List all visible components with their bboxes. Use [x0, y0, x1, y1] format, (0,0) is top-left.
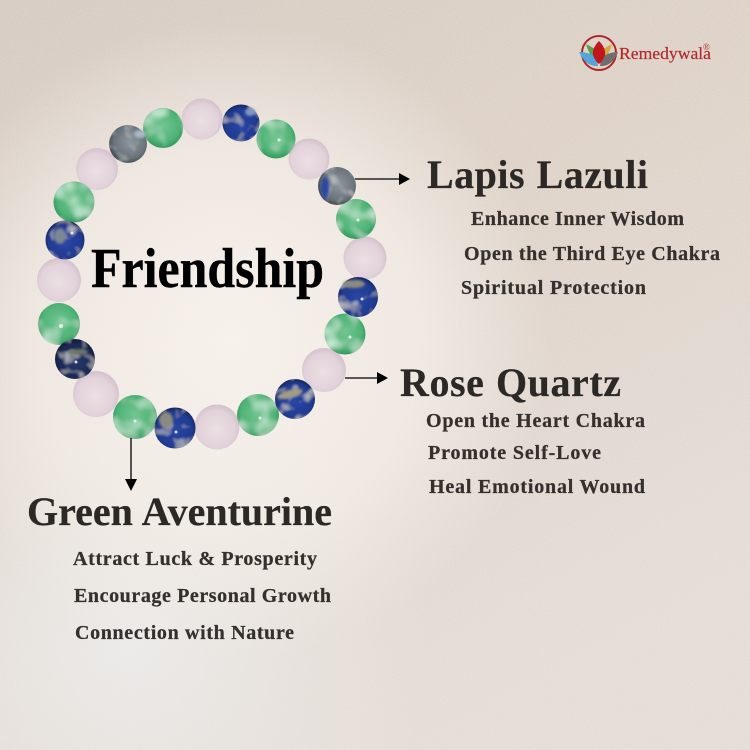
lapis mineral patches	[54, 108, 365, 428]
bead highlights	[59, 138, 364, 434]
benefit 2: Encourage Personal Growth	[74, 585, 331, 607]
registered mark: ®	[703, 42, 710, 52]
icon: lotus in ring	[579, 36, 618, 70]
benefit 3: Spiritual Protection	[461, 277, 646, 299]
panel: Green Aventurine	[27, 489, 332, 644]
panel: Rose Quartz	[400, 360, 645, 498]
logo: Remedywala	[579, 36, 711, 70]
heading: Rose Quartz	[400, 360, 621, 405]
benefit 1: Attract Luck & Prosperity	[73, 548, 317, 570]
lapis lazuli beads	[46, 104, 378, 448]
heading: Lapis Lazuli	[427, 152, 648, 197]
bracelet	[37, 98, 386, 450]
rose quartz beads	[37, 98, 386, 450]
logo wordmark: Remedywala	[619, 44, 711, 63]
benefit 3: Heal Emotional Wound	[429, 476, 645, 498]
arrow: to Green Aventurine	[125, 438, 137, 491]
arrow: to Lapis Lazuli	[355, 173, 410, 185]
benefit 1: Open the Heart Chakra	[426, 410, 645, 432]
green aventurine beads	[38, 108, 376, 439]
title: Friendship: Friendship	[91, 238, 324, 300]
benefit 2: Open the Third Eye Chakra	[464, 243, 720, 265]
benefit 2: Promote Self-Love	[428, 442, 601, 464]
benefit 3: Connection with Nature	[75, 622, 294, 644]
arrow: to Rose Quartz	[345, 372, 388, 384]
benefit 1: Enhance Inner Wisdom	[471, 208, 684, 230]
heading: Green Aventurine	[27, 489, 332, 534]
panel: Lapis Lazuli	[427, 152, 720, 299]
